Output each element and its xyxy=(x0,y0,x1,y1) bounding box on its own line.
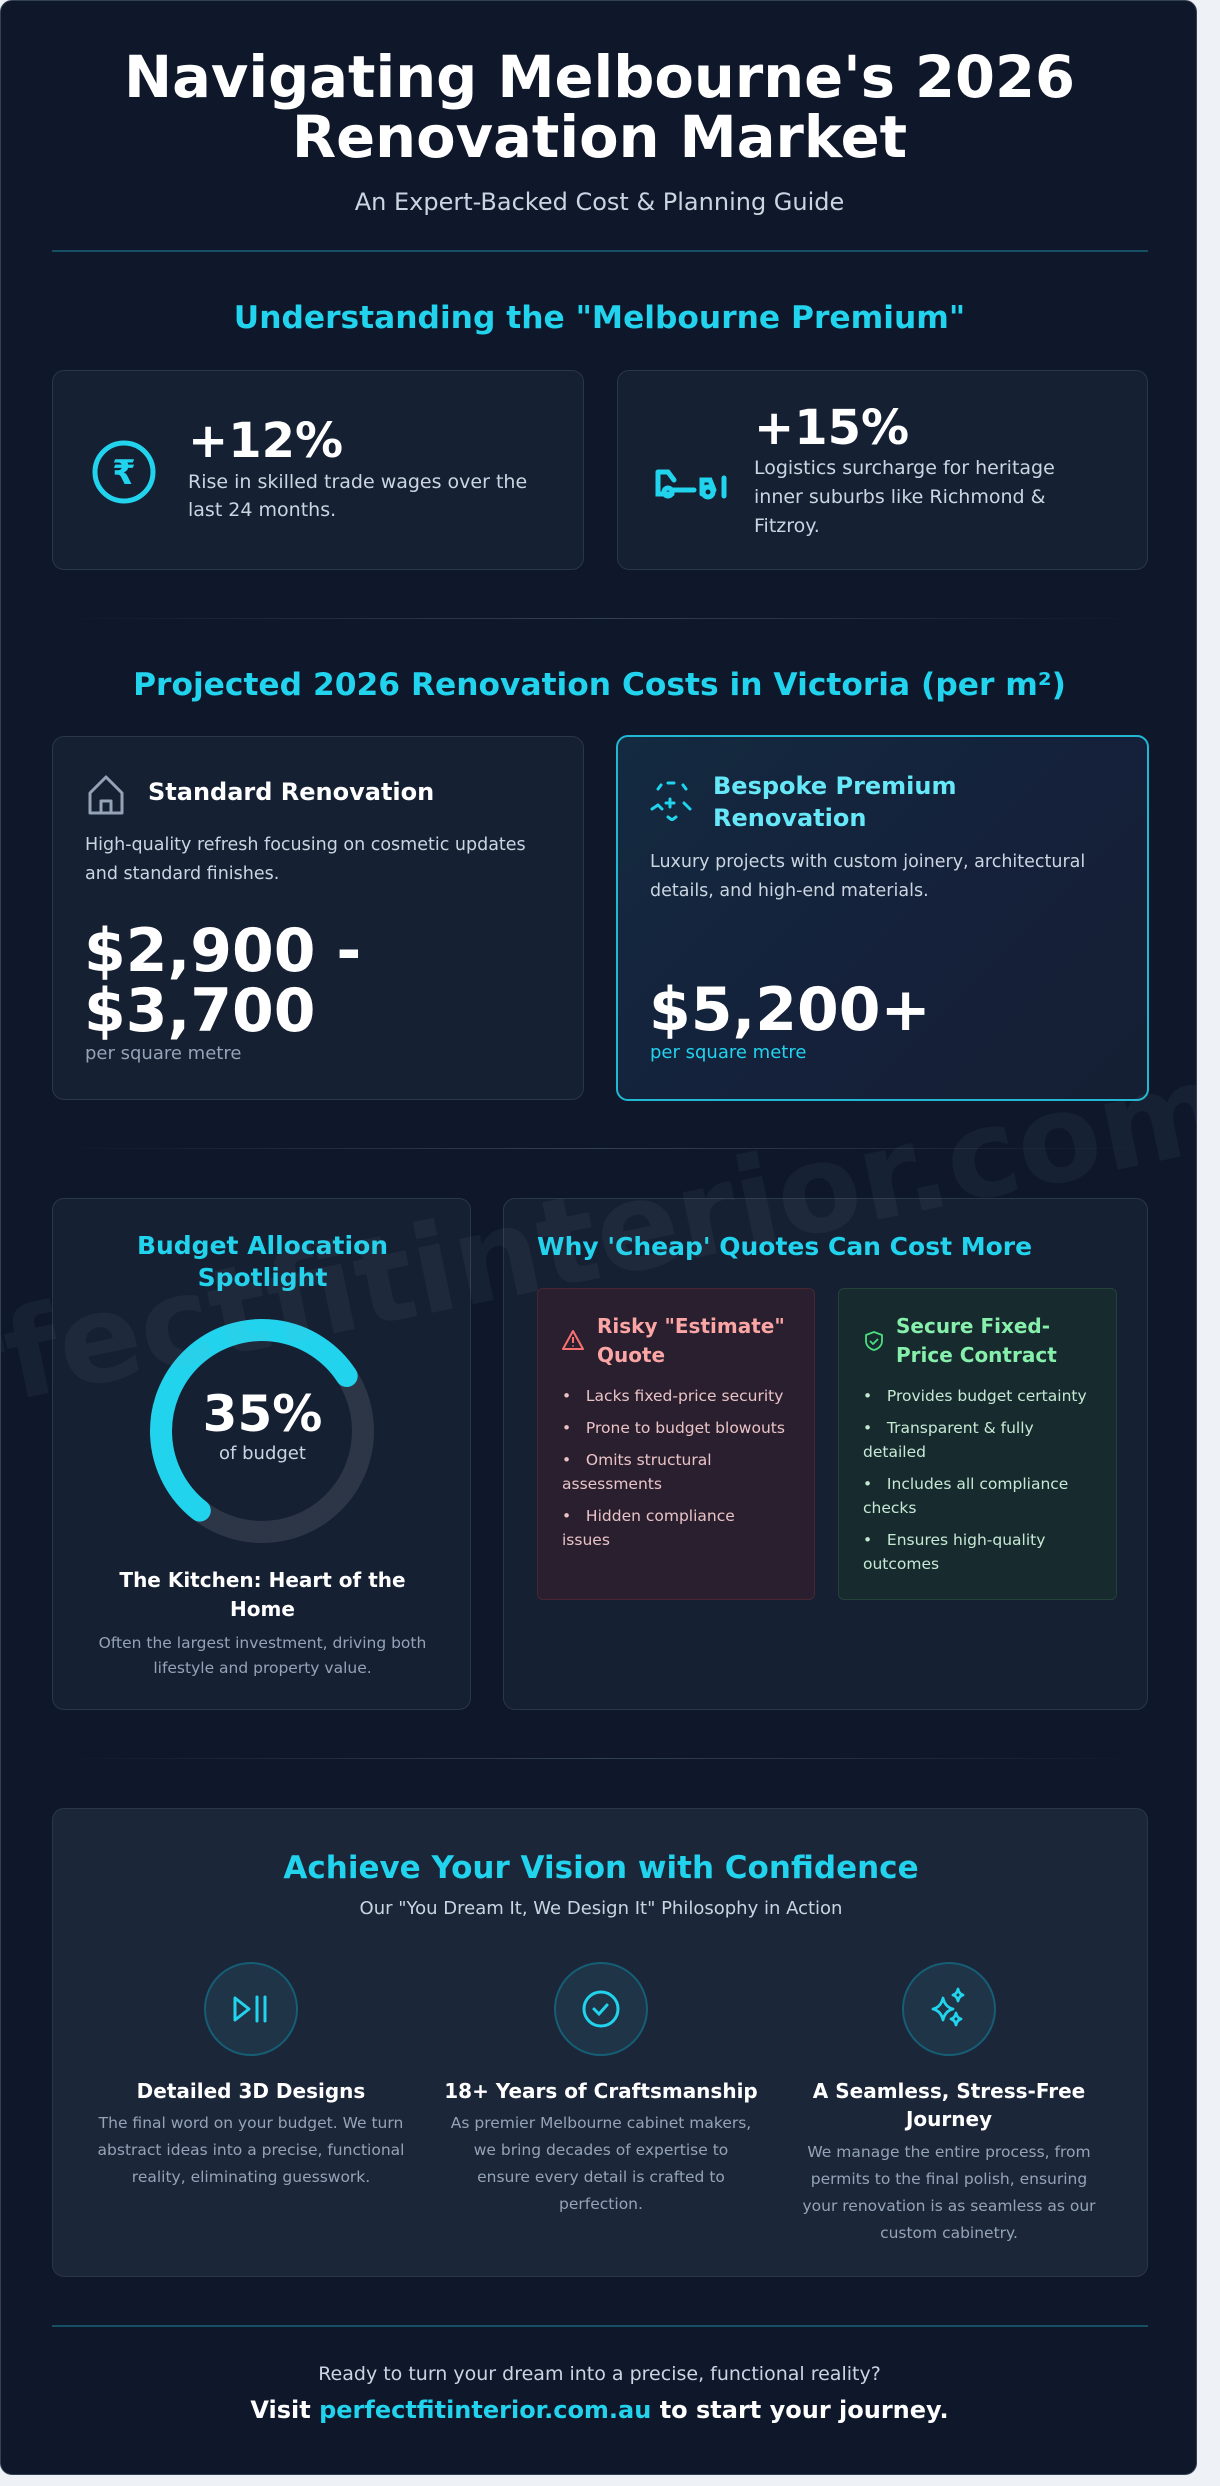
card title: Bespoke Premium Renovation xyxy=(713,772,957,832)
bullets xyxy=(863,1387,1087,1573)
donut value: 35% xyxy=(203,1385,322,1443)
icon: shield xyxy=(865,1331,883,1351)
heading: Why 'Cheap' Quotes Can Cost More xyxy=(537,1232,1032,1261)
title: Risky "Estimate" Quote xyxy=(597,1314,785,1367)
stat text: Logistics surcharge for heritage inner suburbs like Richmond & Fitzroy. xyxy=(754,457,1055,537)
heading xyxy=(137,1231,388,1292)
title: Navigating Melbourne's 2026 xyxy=(124,44,1075,111)
bullets: checks xyxy=(863,1499,916,1517)
donut label: of budget xyxy=(219,1443,306,1464)
icon: bespoke xyxy=(650,782,692,821)
bullets: • Ensures high-quality xyxy=(863,1531,1045,1549)
unit: per square metre xyxy=(85,1043,241,1064)
bullets: assessments xyxy=(562,1475,662,1493)
footer cta: Visit perfectfitinterior.com.au to start your journey. xyxy=(250,2396,949,2424)
heading: projected costs: Projected 2026 Renovation Costs in Victoria (per m²) xyxy=(133,667,1066,703)
feature: 3D designs xyxy=(98,1962,404,2186)
kitchen desc: Often the largest investment, driving both lifestyle and property value. xyxy=(99,1634,426,1677)
icon: rupee: ₹ xyxy=(112,453,136,493)
price: $3,700 xyxy=(84,976,316,1046)
icon: house xyxy=(88,775,124,814)
stat text: Rise in skilled trade wages over the last 24 months. xyxy=(188,471,527,521)
box: secure xyxy=(838,1288,1117,1600)
title xyxy=(124,44,1075,171)
bullets: outcomes xyxy=(863,1555,939,1573)
desc: As premier Melbourne cabinet makers, we bring decades of expertise to ensure every detail is crafted to perfection. xyxy=(451,2114,751,2213)
kitchen title: The Kitchen: Heart of the Home xyxy=(119,1568,406,1621)
icon: rupee xyxy=(92,440,156,504)
panel: cheap quotes xyxy=(503,1198,1148,1710)
bullets: • Hidden compliance xyxy=(562,1507,735,1525)
heading: Spotlight xyxy=(198,1263,327,1292)
title: A Seamless, Stress-Free Journey xyxy=(813,2079,1085,2131)
bullets: • Lacks fixed-price security xyxy=(562,1387,783,1405)
feature: seamless xyxy=(802,1962,1096,2242)
heading: Achieve Your Vision with Confidence xyxy=(283,1850,919,1886)
card desc: High-quality refresh focusing on cosmetic updates and standard finishes. xyxy=(85,835,526,884)
donut chart xyxy=(150,1319,374,1543)
bullets: • Includes all compliance xyxy=(863,1475,1068,1493)
price card: standard xyxy=(52,736,584,1100)
unit: per square metre xyxy=(650,1042,806,1063)
price: $5,200+ xyxy=(649,975,931,1045)
stat card: wages xyxy=(52,370,584,570)
price card: bespoke xyxy=(616,735,1149,1101)
desc: We manage the entire process, from permits to the final polish, ensuring your renovation is as seamless as our custom cabinetry. xyxy=(802,2143,1096,2242)
footer question: Ready to turn your dream into a precise, functional reality? xyxy=(318,2363,881,2385)
panel: vision xyxy=(52,1808,1148,2277)
title: Secure Fixed-Price Contract xyxy=(896,1314,1057,1367)
bullets: • Omits structural xyxy=(562,1451,712,1469)
price: $2,900 - xyxy=(84,916,361,986)
subheading: Our "You Dream It, We Design It" Philosophy in Action xyxy=(360,1898,842,1919)
title: Renovation Market xyxy=(292,104,907,171)
heading: melbourne premium: Understanding the "Melbourne Premium" xyxy=(234,300,965,336)
bullets: • Prone to budget blowouts xyxy=(562,1419,785,1437)
title: 18+ Years of Craftsmanship xyxy=(444,2079,758,2103)
box: risky xyxy=(537,1288,815,1600)
bullets xyxy=(562,1387,785,1549)
bullets: issues xyxy=(562,1531,610,1549)
bullets: • Provides budget certainty xyxy=(863,1387,1087,1405)
stat: +12%: +12% xyxy=(188,413,343,469)
panel: budget allocation xyxy=(52,1198,471,1710)
heading: Budget Allocation xyxy=(137,1231,388,1260)
bullets: • Transparent & fully xyxy=(863,1419,1034,1437)
price xyxy=(84,916,361,1046)
stat: +15%: +15% xyxy=(754,400,909,456)
title: Detailed 3D Designs xyxy=(137,2079,365,2103)
card title: Standard Renovation xyxy=(148,778,434,806)
icon: truck xyxy=(656,470,726,500)
icon: check xyxy=(554,1962,648,2056)
bullets: detailed xyxy=(863,1443,926,1461)
desc: The final word on your budget. We turn abstract ideas into a precise, functional reality, eliminating guesswork. xyxy=(98,2114,404,2186)
icon: warning xyxy=(562,1330,584,1350)
feature: craftsmanship xyxy=(444,1962,758,2213)
icon: play xyxy=(204,1962,298,2056)
stat card: logistics xyxy=(617,370,1148,570)
subtitle: An Expert-Backed Cost & Planning Guide xyxy=(355,188,844,216)
card desc: Luxury projects with custom joinery, architectural details, and high-end materials. xyxy=(650,852,1085,901)
icon: sparkles xyxy=(902,1962,996,2056)
